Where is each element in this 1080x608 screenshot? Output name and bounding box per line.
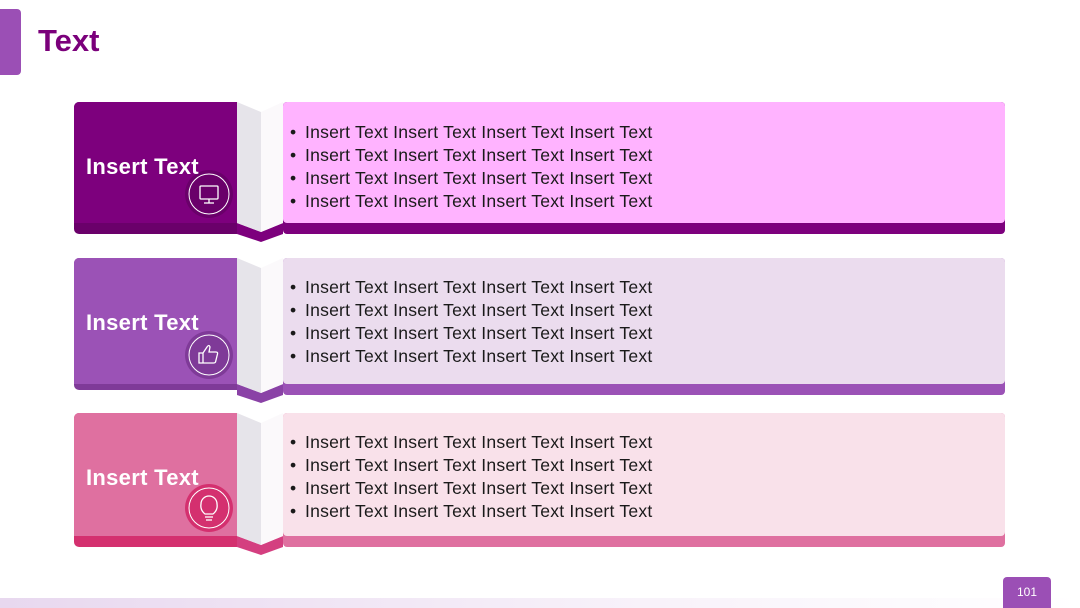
row 2 bullets: Insert Text Insert Text Insert Text Insert Text: [305, 277, 652, 297]
row 3 bullets: Insert Text Insert Text Insert Text Insert Text: [305, 432, 652, 452]
row 1 label: Insert Text: [86, 154, 199, 179]
row 1 bullets: Insert Text Insert Text Insert Text Insert Text: [305, 145, 652, 165]
row 2 shapes: [74, 258, 1005, 403]
row 1 bullets: Insert Text Insert Text Insert Text Insert Text: [305, 122, 652, 142]
row 2 bullets: [290, 277, 652, 366]
row 2 bullets: Insert Text Insert Text Insert Text Insert Text: [305, 323, 652, 343]
row 3 label: Insert Text: [86, 465, 199, 490]
row 3 bullets: Insert Text Insert Text Insert Text Insert Text: [305, 455, 652, 475]
row 3 bullets: [290, 432, 652, 521]
row 3 bullets: Insert Text Insert Text Insert Text Insert Text: [305, 478, 652, 498]
icon: thumbs up: [185, 331, 233, 379]
row 1 bullets: Insert Text Insert Text Insert Text Insert Text: [305, 168, 652, 188]
row 3 bullets: Insert Text Insert Text Insert Text Insert Text: [305, 501, 652, 521]
row 3 shapes: [74, 413, 1005, 555]
bottom gradient strip: [0, 598, 1080, 608]
row 1 bullets: [290, 122, 652, 211]
row 2 bullets: Insert Text Insert Text Insert Text Insert Text: [305, 300, 652, 320]
row 1 shapes: [74, 102, 1005, 242]
title: Text: [38, 23, 99, 58]
icon: monitor: [185, 170, 233, 218]
page number: 101: [1017, 585, 1037, 599]
row 2 bullets: Insert Text Insert Text Insert Text Insert Text: [305, 346, 652, 366]
row 2 label: Insert Text: [86, 310, 199, 335]
title accent bar: [0, 9, 21, 75]
page number: [1003, 577, 1051, 608]
icon: light bulb: [185, 484, 233, 532]
row 1 bullets: Insert Text Insert Text Insert Text Insert Text: [305, 191, 652, 211]
